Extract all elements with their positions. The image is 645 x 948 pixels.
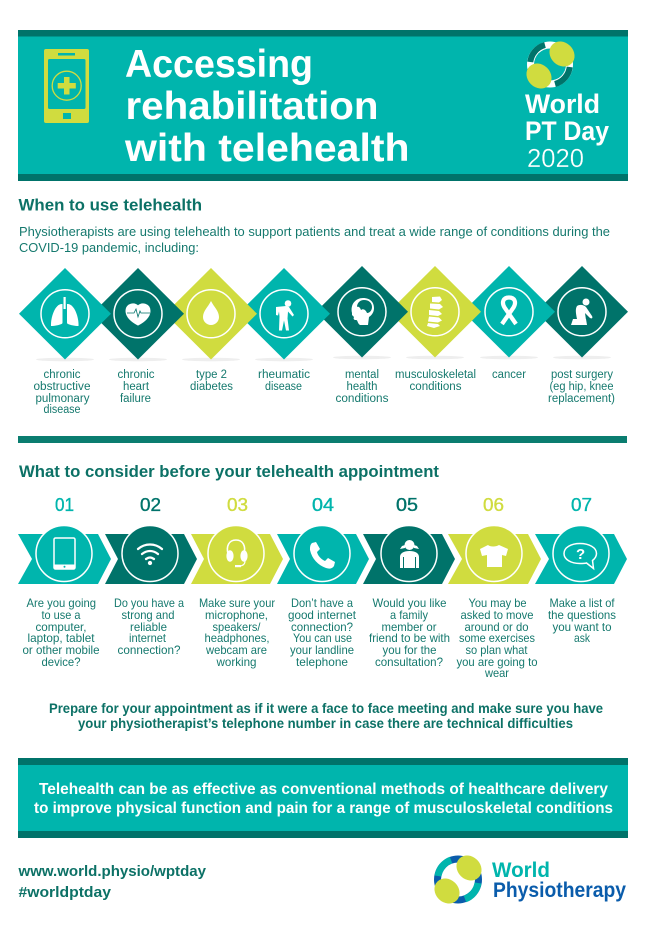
label: mental health conditions: mental <box>345 369 379 381</box>
step numbers: 01 <box>55 495 74 515</box>
step text 04: telephone <box>296 655 348 669</box>
label: COPD <box>34 369 90 416</box>
label: mental health conditions <box>336 369 389 405</box>
diamond: type 2 diabetes <box>165 268 257 361</box>
step text 05: a family <box>390 608 428 622</box>
step text 01: or other mobile <box>22 643 100 657</box>
callout text <box>34 781 613 817</box>
step text 04 <box>288 596 357 669</box>
icon: speech bubble: ? <box>576 546 585 563</box>
step text 04: your landline <box>290 643 354 657</box>
diamond: rheumatic disease <box>238 268 330 361</box>
step text 05: member or <box>382 620 437 634</box>
step text 01: Are you going <box>26 596 96 610</box>
logo: World PT Day 2020 <box>521 36 609 173</box>
title: Accessing <box>125 43 313 86</box>
footer links: www.world.physio/wptday <box>17 863 207 880</box>
step text 02: connection? <box>118 643 181 657</box>
step numbers: 03 <box>227 495 248 515</box>
step text 07: ask <box>574 631 591 645</box>
step text 07: you want to <box>552 620 612 634</box>
label: COPD: disease <box>44 404 80 416</box>
label: post surgery: post surgery <box>551 369 613 381</box>
step text 05: friend to be with <box>369 631 450 645</box>
step numbers: 04 <box>312 495 334 515</box>
chevron 06: t-shirt <box>448 526 541 584</box>
label: type 2 diabetes: type 2 <box>196 369 227 381</box>
text block: prepare for your appointment <box>49 700 603 731</box>
step text 03: Make sure your <box>199 596 275 610</box>
step text 06: You may be <box>468 596 527 610</box>
icon: smartphone with medical cross <box>44 49 89 123</box>
icon: drop <box>203 301 219 325</box>
panel: header banner <box>18 30 628 181</box>
step text 07: the questions <box>548 608 616 622</box>
step text 07: Make a list of <box>550 596 615 610</box>
step text 02 <box>114 596 184 657</box>
label: cancer: cancer <box>492 369 526 381</box>
step text 01: laptop, tablet <box>28 631 95 645</box>
icon: spine <box>427 296 443 328</box>
text block: intro: COVID-19 pandemic, including: <box>19 240 199 255</box>
step text 05: consultation? <box>375 655 443 669</box>
step text 02: Do you have a <box>114 596 184 610</box>
label: type 2 diabetes: diabetes <box>190 381 233 393</box>
step numbers: 02 <box>140 495 161 515</box>
logo: World PT Day 2020: PT Day <box>525 116 609 146</box>
step numbers: 06 <box>483 495 504 515</box>
step text 06: so plan what <box>466 643 528 657</box>
footer links: #worldptday <box>18 884 112 901</box>
label: chronic heart failure: heart <box>123 381 150 393</box>
panel: step chevrons <box>18 526 627 584</box>
chevron 03: headset <box>191 526 283 584</box>
heading: what to consider: What to consider before your telehealth appointment <box>19 463 440 481</box>
step text 03: microphone, <box>205 608 268 622</box>
icon: girl <box>400 540 419 568</box>
step text 04: Don’t have a <box>291 596 353 610</box>
icon: heart with pulse <box>126 304 150 325</box>
step text 02: strong and <box>122 608 174 622</box>
step text 04: connection? <box>291 620 353 634</box>
logo: World Physiotherapy: World <box>492 859 550 882</box>
label: chronic heart failure: failure <box>120 393 151 405</box>
logo: World PT Day 2020: 2020 <box>527 143 584 173</box>
label: mental health conditions: health <box>346 381 378 393</box>
chevron 07: question bubble <box>535 526 627 584</box>
label: rheumatic disease: disease <box>265 381 302 393</box>
step text 06: asked to move <box>460 608 534 622</box>
step text 03: headphones, <box>204 631 270 645</box>
step text 03: working <box>216 655 256 669</box>
diamond: musculoskeletal <box>389 266 481 359</box>
label: rheumatic disease <box>258 369 310 393</box>
diamond: chronic heart failure <box>92 268 184 361</box>
step text 01: to use a <box>42 608 81 622</box>
icon: walking figure <box>276 300 294 330</box>
diamond: mental health <box>316 266 408 359</box>
label: post surgery: replacement) <box>548 393 615 405</box>
title <box>124 43 409 170</box>
diamond: COPD <box>19 268 111 361</box>
diamond: cancer <box>463 266 555 359</box>
icon: head with brain <box>352 298 374 325</box>
chevron 02: wifi <box>105 526 197 584</box>
text block: intro <box>19 224 610 255</box>
step numbers: 07 <box>571 495 592 515</box>
label: COPD: chronic <box>44 369 81 381</box>
label: chronic heart failure: chronic <box>118 369 155 381</box>
step text 04: good internet <box>288 608 357 622</box>
step text 01 <box>22 596 100 669</box>
label: mental health conditions: conditions <box>336 393 389 405</box>
title: rehabilitation <box>126 85 378 128</box>
step text 06: some exercises <box>459 631 535 645</box>
callout text: Telehealth can be as effective as conventional methods of healthcare delivery <box>39 781 608 798</box>
panel: effectiveness callout <box>18 758 628 838</box>
icon: tablet <box>54 538 75 569</box>
condition labels <box>34 369 615 416</box>
step text 06 <box>456 596 538 680</box>
step text 02: internet <box>129 631 167 645</box>
icon: handset <box>310 542 335 569</box>
step text 02: reliable <box>130 620 167 634</box>
label: musculoskeletal conditions <box>395 369 476 393</box>
step text 05: you for the <box>382 643 437 657</box>
text block: intro: Physiotherapists are using telehealth to support patients and treat a wide range of conditions during the <box>19 224 610 239</box>
callout text: to improve physical function and pain for a range of musculoskeletal conditions <box>34 800 613 817</box>
logo: World Physiotherapy: Physiotherapy <box>493 879 626 902</box>
heading: when to use telehealth: When to use telehealth <box>18 196 202 214</box>
step text 01: computer, <box>36 620 86 634</box>
icon: awareness ribbon <box>502 298 516 324</box>
label: COPD: obstructive <box>34 381 90 393</box>
step text 03: webcam are <box>205 643 267 657</box>
diamond: post surgery <box>536 266 628 359</box>
step text 06: you are going to <box>456 655 538 669</box>
label: chronic heart failure <box>118 369 155 405</box>
label: post surgery: (eg hip, knee <box>550 381 614 393</box>
step text 07 <box>548 596 616 645</box>
logo: World PT Day 2020: World <box>525 89 600 119</box>
panel: condition diamonds <box>19 266 628 361</box>
step numbers: 05 <box>396 495 418 515</box>
icon: wifi <box>138 544 162 564</box>
label: musculoskeletal conditions: musculoskeletal <box>395 369 476 381</box>
step text 06: wear <box>484 666 509 680</box>
footer links <box>17 863 207 901</box>
step text 01: device? <box>42 655 81 669</box>
label: type 2 diabetes <box>190 369 233 393</box>
step text 05 <box>369 596 450 669</box>
step text 03 <box>199 596 275 669</box>
title: with telehealth <box>124 127 409 170</box>
step descriptions <box>22 596 616 680</box>
label: rheumatic disease: rheumatic <box>258 369 310 381</box>
text block: prepare for your appointment: Prepare for your appointment as if it were a face to face meeting and make sure you have <box>49 700 603 716</box>
icon: seated person <box>571 298 592 325</box>
label: COPD: pulmonary <box>36 393 90 405</box>
step text 03: speakers/ <box>212 620 261 634</box>
chevron 01: tablet <box>18 526 111 584</box>
icon: lungs <box>51 297 79 326</box>
step text 06: around or do <box>464 620 529 634</box>
text block: prepare for your appointment: your physiotherapist’s telephone number in case there are technical difficulties <box>78 715 573 731</box>
icon: headset <box>227 540 247 567</box>
logo: World Physiotherapy <box>429 850 626 909</box>
step numbers <box>55 495 592 515</box>
chevron 04: telephone <box>277 526 369 584</box>
label: post surgery <box>548 369 615 405</box>
step text 05: Would you like <box>372 596 447 610</box>
icon: t-shirt <box>480 545 508 567</box>
label: musculoskeletal conditions: conditions <box>410 381 462 393</box>
step text 04: You can use <box>293 631 352 645</box>
chevron 05: person <box>363 526 455 584</box>
